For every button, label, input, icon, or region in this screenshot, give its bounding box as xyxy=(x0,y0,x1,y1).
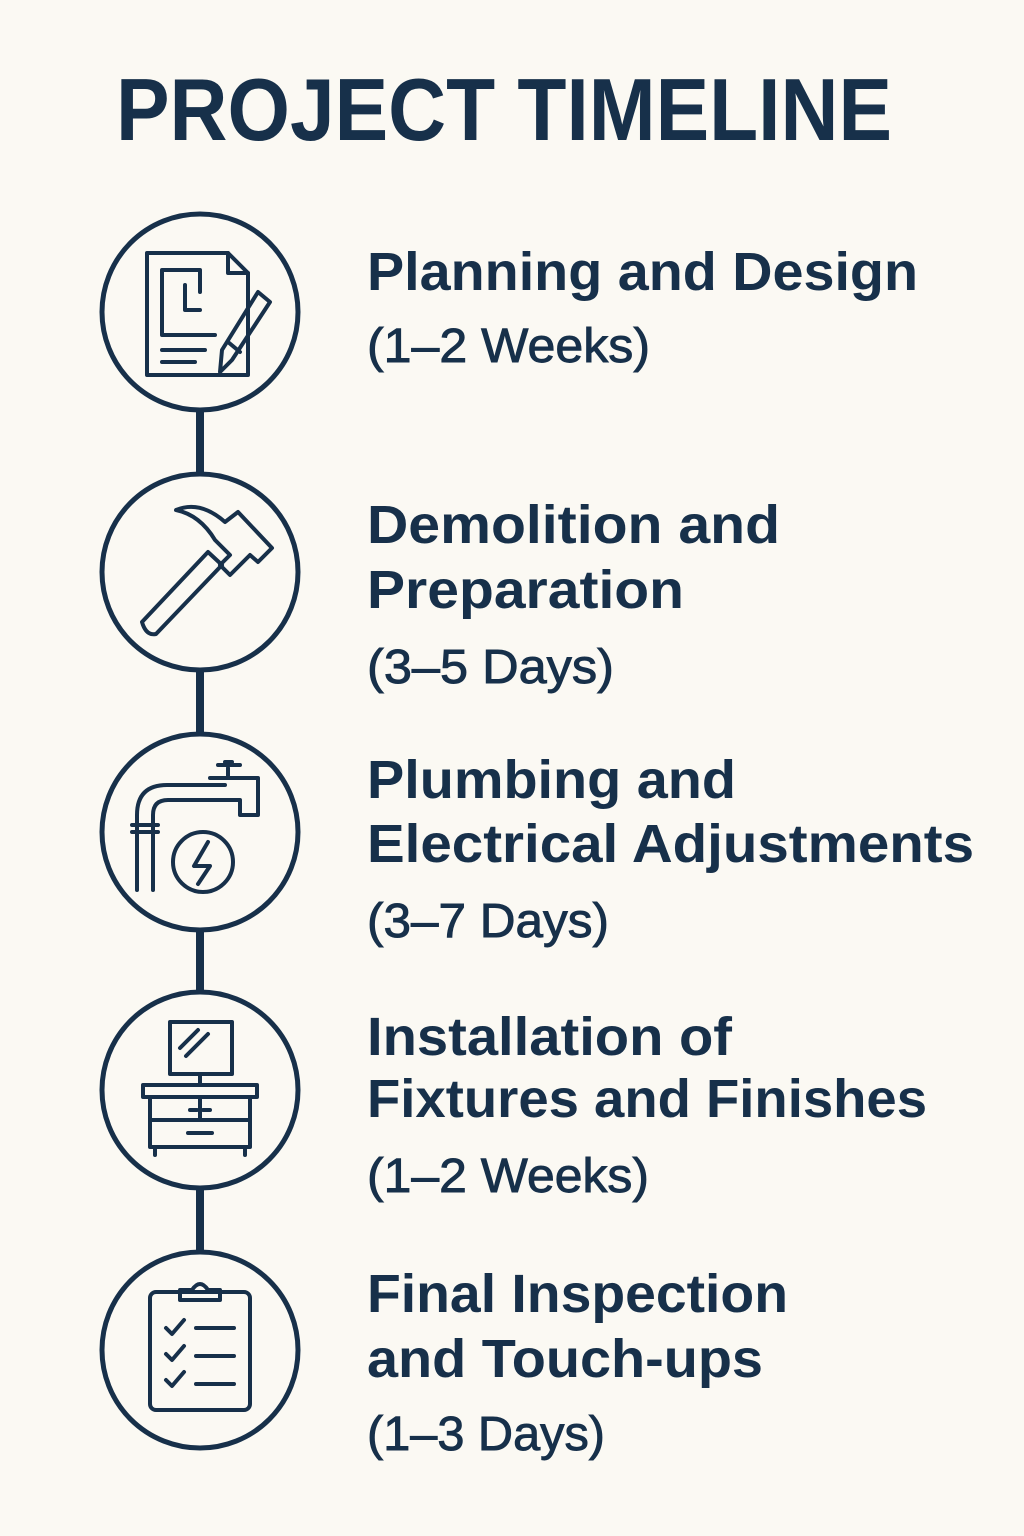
heading: Plumbing and xyxy=(367,750,736,810)
step 5: inspection: and Touch-ups xyxy=(367,1329,763,1389)
step 1: planning and design xyxy=(102,214,918,410)
duration: (1–2 Weeks) xyxy=(367,1150,649,1203)
heading: Planning and Design xyxy=(367,242,918,302)
heading: Final Inspection xyxy=(367,1264,788,1324)
icon: vanity and mirror xyxy=(102,992,298,1188)
heading: Demolition and xyxy=(367,495,780,555)
duration: (1–3 Days) xyxy=(367,1408,605,1461)
step 5: inspection xyxy=(102,1252,788,1461)
duration: (3–5 Days) xyxy=(367,641,614,694)
step 4: fixtures xyxy=(102,992,927,1203)
icon: hammer xyxy=(102,474,298,670)
step 3: plumbing: Electrical Adjustments xyxy=(367,814,974,874)
step 2: demolition: Preparation xyxy=(367,560,684,620)
icon: pipes and lightning xyxy=(102,734,298,930)
step 3: plumbing xyxy=(102,734,974,948)
title: PROJECT TIMELINE xyxy=(116,60,892,159)
icon: checklist clipboard xyxy=(102,1252,298,1448)
timeline connector xyxy=(196,410,204,1252)
step 4: fixtures: Fixtures and Finishes xyxy=(367,1069,927,1129)
step 2: demolition xyxy=(102,474,780,694)
duration: (3–7 Days) xyxy=(367,895,609,948)
heading: Installation of xyxy=(367,1007,733,1067)
icon: blueprint and pencil xyxy=(102,214,298,410)
duration: (1–2 Weeks) xyxy=(367,320,650,373)
